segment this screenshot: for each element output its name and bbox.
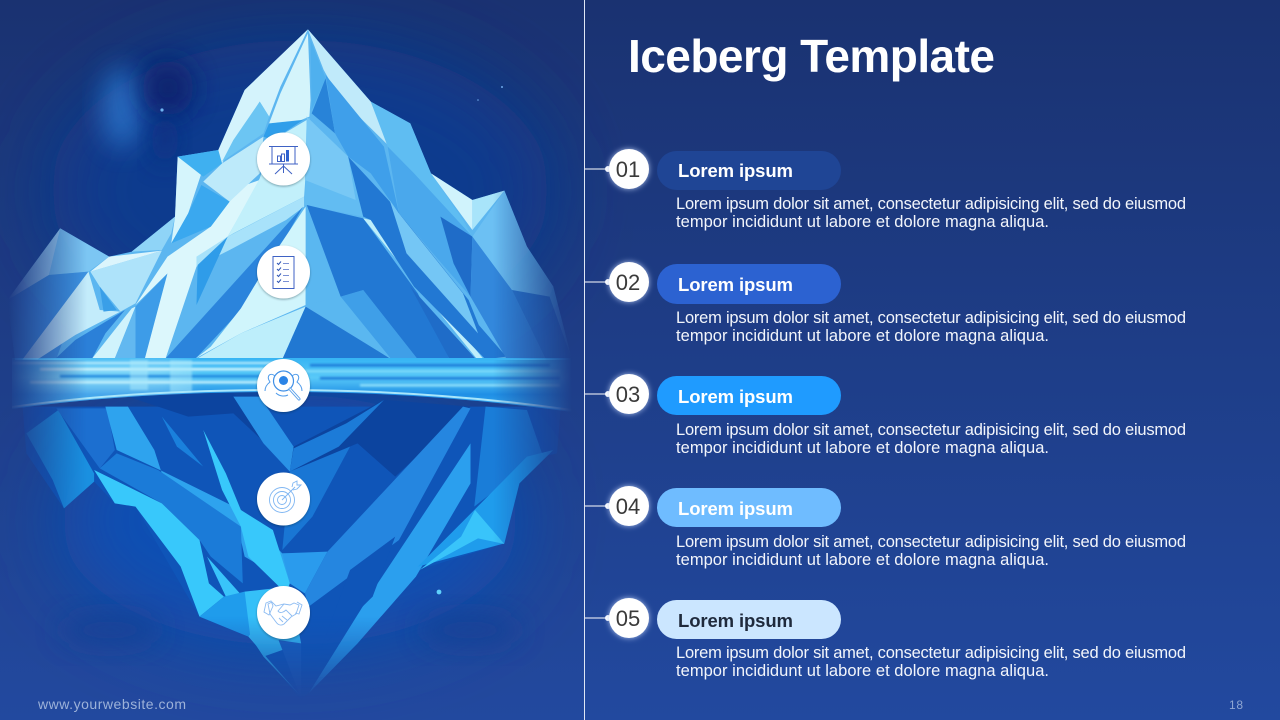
number badge 02: 02 [616,270,640,295]
connector 04 [585,505,608,507]
description 04: Lorem ipsum dolor sit amet, consectetur adipisicing elit, sed do eiusmod [676,533,1186,551]
water surface band [12,358,572,414]
star [437,590,441,594]
pill heading 05 [657,600,841,639]
pill heading 03 [657,376,841,415]
item 01 [585,149,1190,231]
description 01: Lorem ipsum dolor sit amet, consectetur adipisicing elit, sed do eiusmod [676,195,1186,213]
title: Iceberg Template [628,30,995,82]
icon: presentation board [257,132,310,186]
number badge 01 [605,149,649,189]
icon: handshake [257,586,310,639]
icon: checklist [257,246,310,298]
description 03: tempor incididunt ut labore et dolore magna aliqua. [676,439,1049,457]
number badge 05: 05 [616,606,640,631]
description 05: tempor incididunt ut labore et dolore magna aliqua. [676,662,1049,680]
icon: target [257,472,310,526]
item 05 [585,598,1190,680]
number badge 04: 04 [616,494,640,519]
night sky glow [50,40,550,340]
vertical divider [584,0,585,720]
description 05: Lorem ipsum dolor sit amet, consectetur adipisicing elit, sed do eiusmod [676,644,1186,662]
pill heading 01 [657,151,841,190]
iceberg above water [8,29,572,360]
icon column [257,132,310,639]
pill heading 03: Lorem ipsum [678,386,793,407]
description 02: Lorem ipsum dolor sit amet, consectetur adipisicing elit, sed do eiusmod [676,309,1186,327]
number badge 05 [605,598,649,638]
pill heading 04 [657,488,841,527]
number badge 01: 01 [616,157,640,182]
description 01: tempor incididunt ut labore et dolore magna aliqua. [676,213,1049,231]
pill heading 02 [657,264,841,304]
description 02: tempor incididunt ut labore et dolore magna aliqua. [676,327,1049,345]
pill heading 05: Lorem ipsum [678,610,793,631]
description 03: Lorem ipsum dolor sit amet, consectetur adipisicing elit, sed do eiusmod [676,421,1186,439]
item 02 [585,262,1190,345]
item 03 [585,374,1190,457]
number badge 03: 03 [616,382,640,407]
number badge 02 [605,262,649,302]
footer website: www.yourwebsite.com [37,696,186,712]
iceberg below water [23,393,561,700]
connector 03 [585,393,608,395]
pill heading 01: Lorem ipsum [678,160,793,181]
pill heading 04: Lorem ipsum [678,498,793,519]
iceberg illustration [8,29,572,700]
page number: 18 [1229,698,1243,712]
number badge 03 [605,374,649,414]
pill heading 02: Lorem ipsum [678,274,793,295]
connector 05 [585,617,608,619]
connector 01 [585,168,608,170]
connector 02 [585,281,608,283]
item 04 [585,486,1190,569]
number badge 04 [605,486,649,526]
icon: people search [257,359,310,412]
underwater glow [60,395,520,648]
description 04: tempor incididunt ut labore et dolore magna aliqua. [676,551,1049,569]
